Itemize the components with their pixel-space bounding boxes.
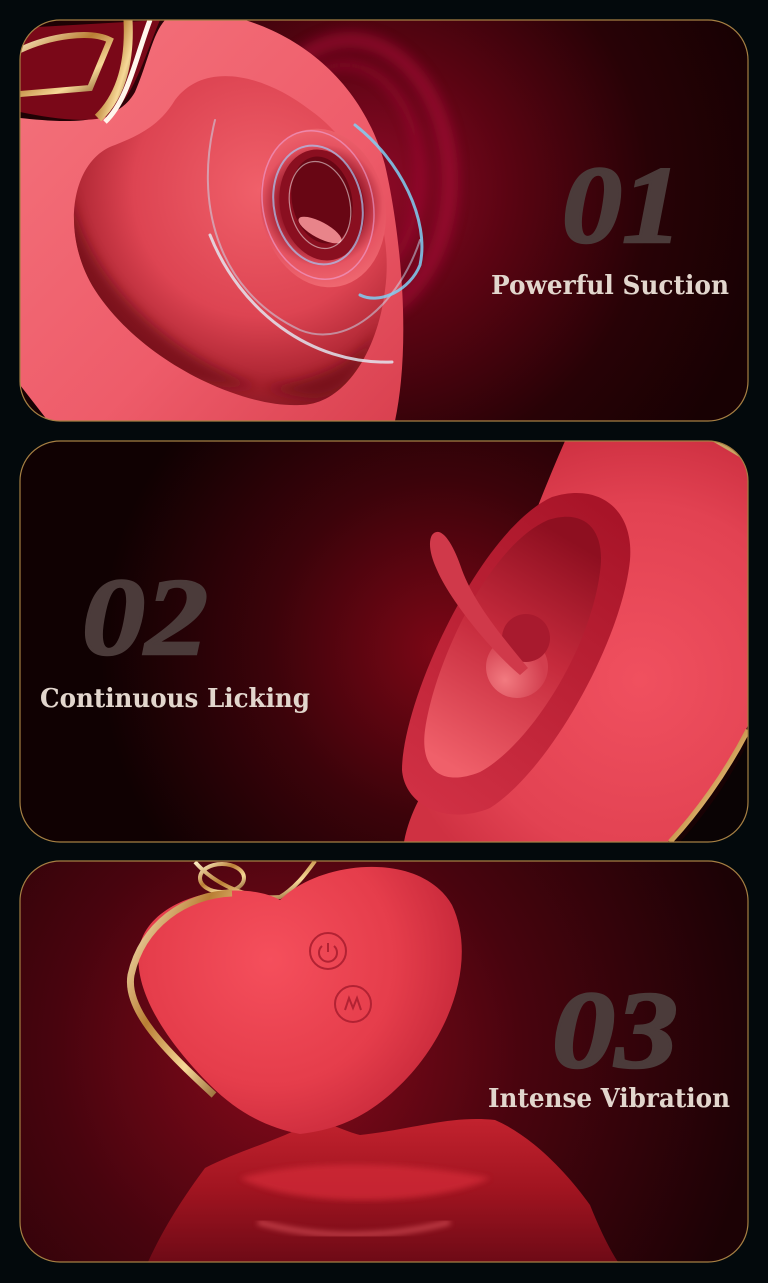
icon: gold chain (195, 861, 315, 897)
icon: mode button (335, 986, 371, 1022)
heading: Powerful Suction: Powerful Suction (491, 271, 729, 301)
icon: heart shaped head (74, 76, 387, 405)
number 01: 01 (562, 144, 682, 266)
icon: inner ball (486, 648, 548, 698)
heading: Intense Vibration: Intense Vibration (488, 1084, 730, 1114)
heading: Continuous Licking: Continuous Licking (40, 684, 310, 714)
panel border (20, 861, 748, 1262)
icon: product body (404, 441, 748, 842)
icon: tongue (430, 532, 528, 675)
number 03: 03 (552, 969, 678, 1091)
panel border (20, 20, 748, 421)
panel: continuous licking (20, 441, 748, 842)
icon: product body (20, 20, 403, 421)
icon: gold heart edge (130, 893, 232, 1095)
panel: powerful suction (20, 20, 748, 421)
icon: suction opening (260, 128, 384, 288)
icon: swirl rings (208, 120, 422, 362)
head shadow (60, 190, 380, 398)
icon: gold handle (20, 20, 160, 120)
number 02: 02 (82, 556, 208, 678)
icon: wavy base (148, 1119, 618, 1262)
icon: licking ring (402, 493, 630, 815)
icon: heart device (138, 867, 462, 1134)
icon: power button (310, 933, 346, 969)
panel border (20, 441, 748, 842)
icon: gold trim (680, 742, 748, 842)
glow rings behind product (298, 26, 462, 314)
panel: intense vibration (20, 861, 748, 1262)
